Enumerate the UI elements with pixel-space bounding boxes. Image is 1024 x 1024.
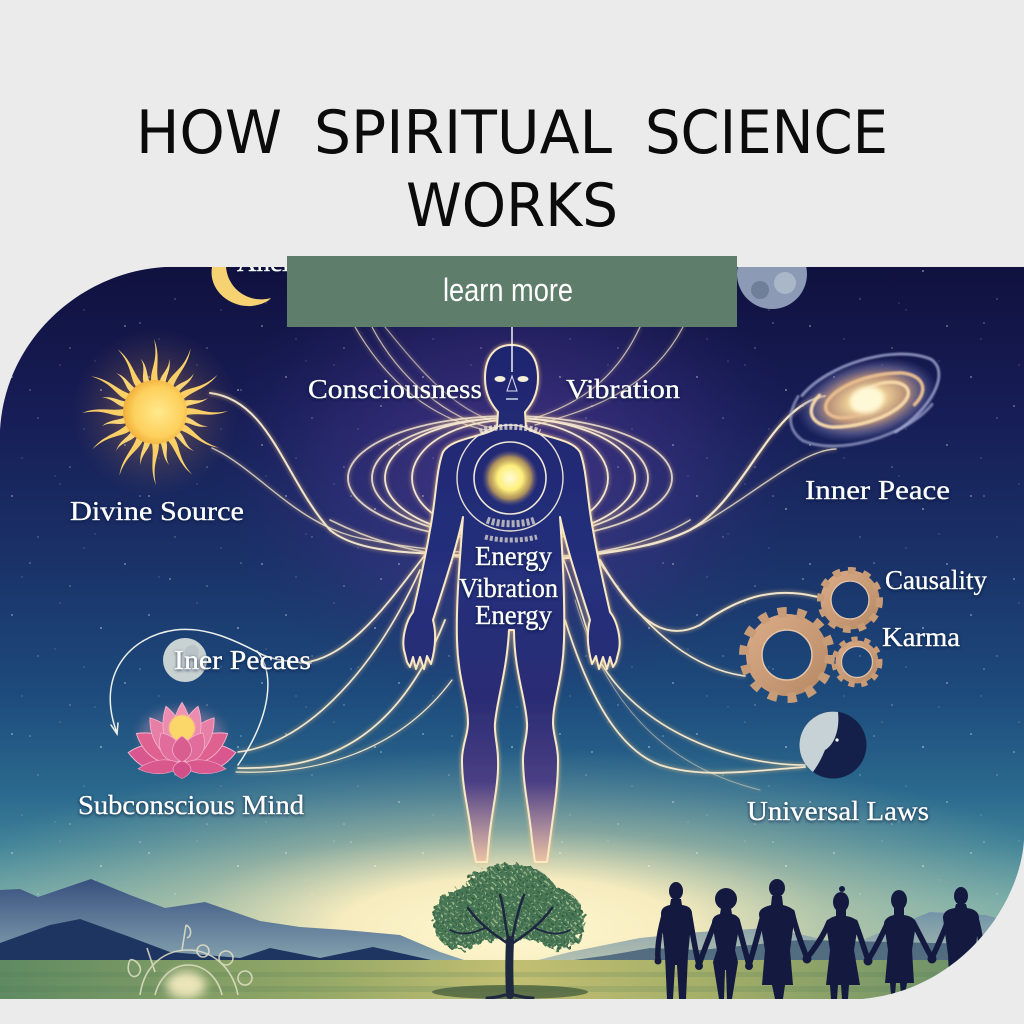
arms — [658, 912, 981, 965]
label: Energy lower: Energy — [475, 600, 552, 630]
face — [494, 327, 528, 399]
arrow: cycle arc through moon to lotus — [110, 629, 311, 765]
night sky background — [0, 240, 1024, 1000]
flowing energy lines — [210, 327, 836, 790]
energy field rings — [348, 416, 672, 540]
title: WORKS — [406, 171, 618, 241]
title: SCIENCE — [645, 98, 888, 168]
glowing symbol circle — [128, 925, 252, 999]
chest chakra — [457, 425, 563, 540]
panel: cosmic illustration — [0, 239, 1024, 1000]
person 6 — [943, 887, 979, 999]
small gear — [834, 640, 880, 684]
title: SPIRITUAL — [314, 98, 613, 168]
icon: sun — [82, 339, 228, 485]
person 5 — [884, 890, 916, 995]
label: Energy upper: Energy — [475, 541, 552, 571]
hands — [654, 954, 936, 970]
person 3 — [759, 879, 795, 999]
icon: half moon — [799, 712, 866, 778]
icon: lotus — [126, 702, 238, 779]
label: Iner Pecaes: Iner Pecaes — [174, 645, 311, 675]
trunk and branches — [450, 895, 570, 998]
label: Vibration centre: Vibration — [459, 573, 558, 603]
person 2 — [712, 888, 740, 999]
title: HOW — [136, 98, 282, 168]
label: Consciousness: Consciousness — [308, 374, 482, 404]
icon: spiral galaxy — [788, 352, 942, 448]
label: Divine Source: Divine Source — [70, 496, 244, 526]
large gear — [744, 612, 830, 698]
cropped label at top: Ancient — [237, 247, 323, 277]
person 4 — [826, 886, 860, 999]
banner: learn more — [287, 256, 737, 327]
label: Inner Peace: Inner Peace — [805, 475, 950, 505]
icon: full moon — [737, 267, 807, 309]
label: Karma: Karma — [882, 622, 960, 652]
upper gear — [820, 570, 880, 630]
label: Subconscious Mind: Subconscious Mind — [78, 790, 305, 820]
canopy — [433, 864, 584, 949]
label: Universal Laws: Universal Laws — [747, 796, 929, 826]
labels — [70, 374, 987, 826]
label: Vibration top: Vibration — [566, 374, 681, 404]
title — [136, 98, 888, 241]
banner: learn more: learn more — [443, 272, 573, 308]
landscape: mountains and meadow — [0, 879, 1024, 1000]
tree of life — [432, 864, 588, 999]
silhouettes holding hands — [654, 879, 981, 999]
icon: small moon — [163, 638, 207, 682]
icon: crescent moon — [212, 267, 271, 306]
label: Causality: Causality — [885, 565, 987, 595]
person 1 — [661, 882, 692, 999]
icon: gears — [744, 570, 880, 698]
human figure of light — [403, 327, 620, 862]
